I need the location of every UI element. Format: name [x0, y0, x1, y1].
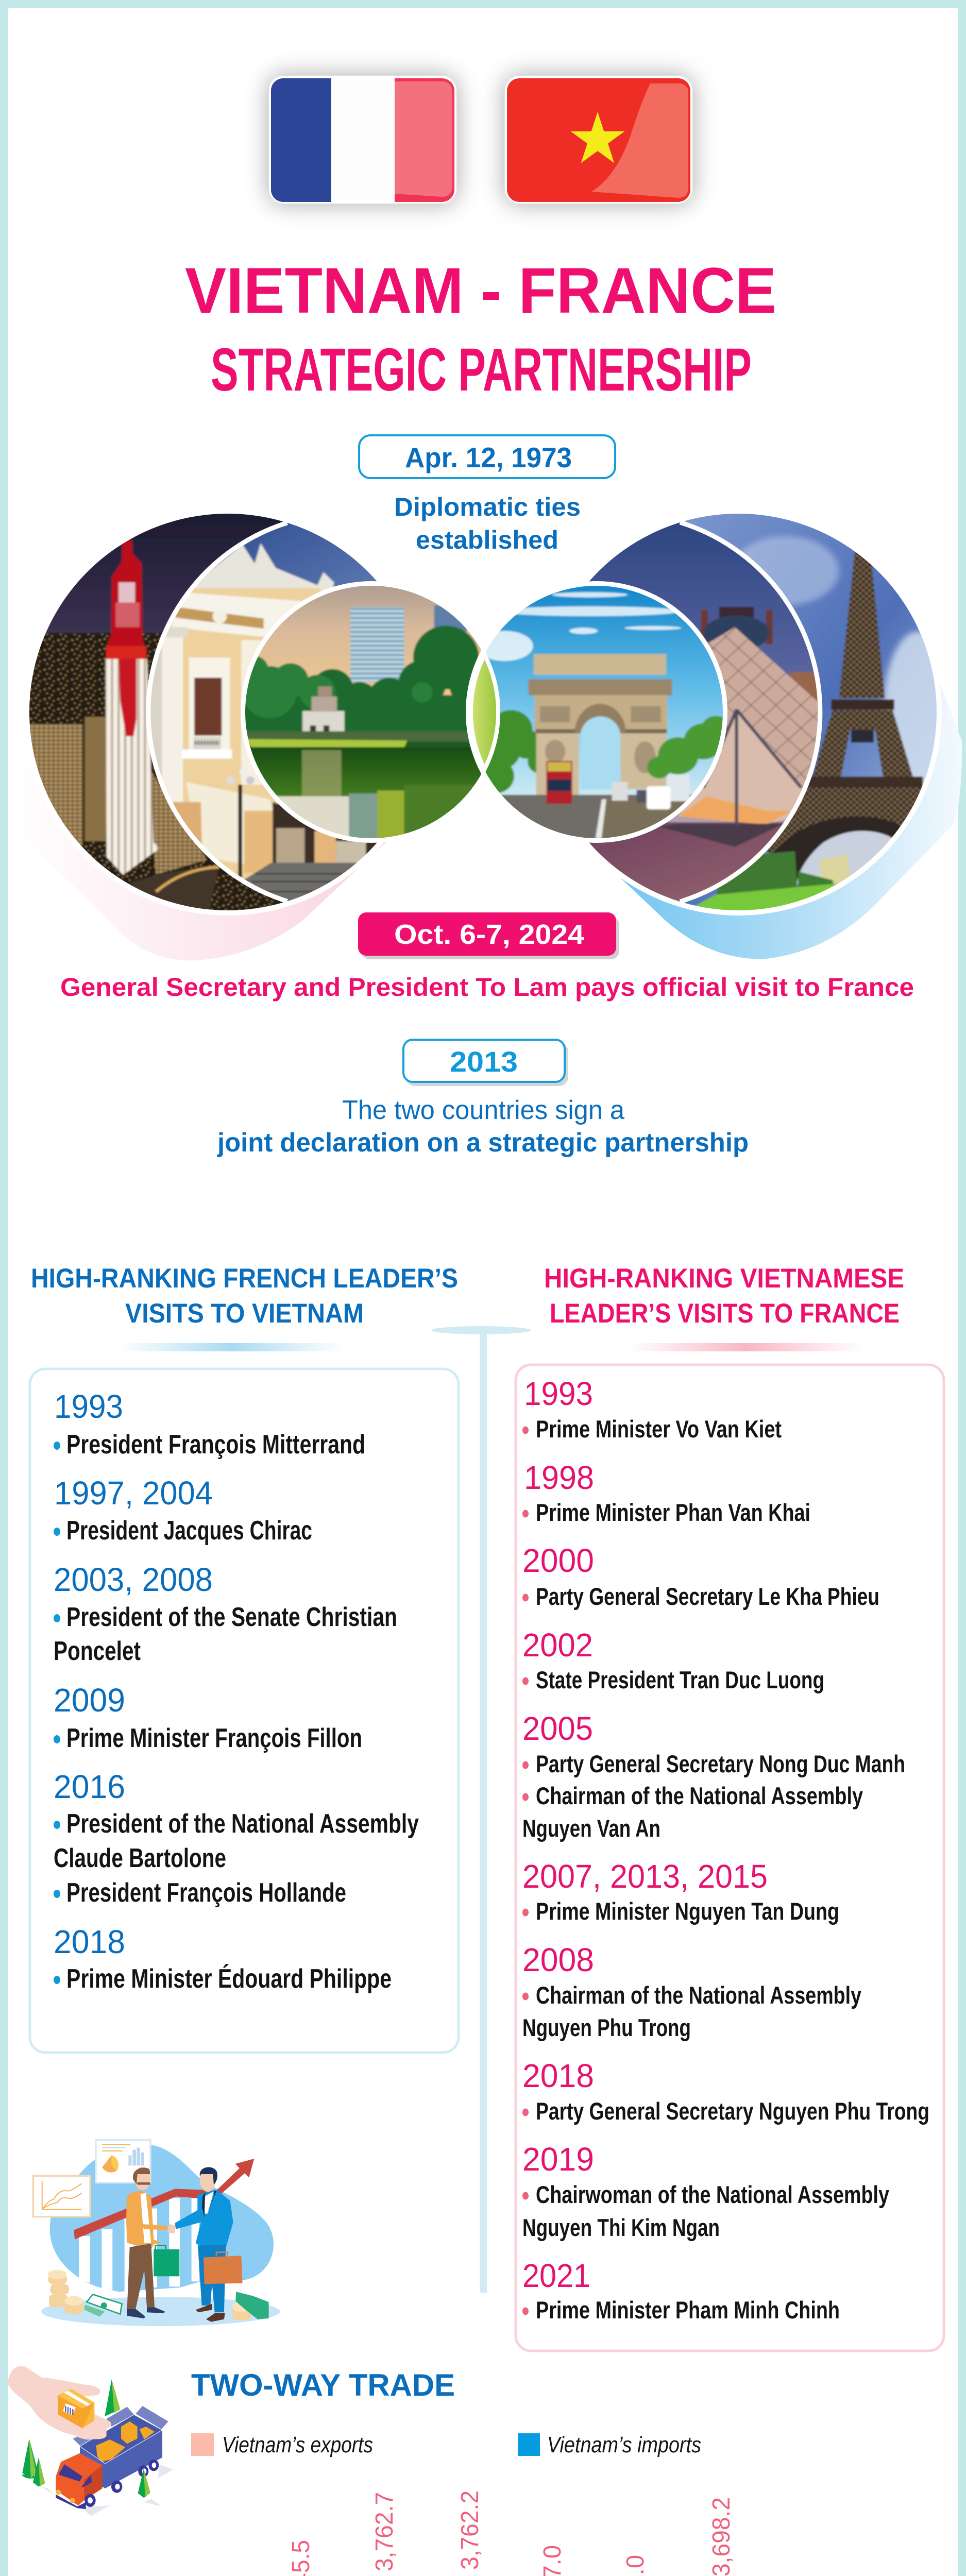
photo collage: Vietnam and France landmarks [0, 493, 966, 960]
text: diplomatic ties: established [416, 526, 558, 554]
entry: 2008: Chairman of the National Assembly [536, 1981, 861, 2009]
entry: 2002: State President Tran Duc Luong [536, 1666, 824, 1693]
entry: 2005: 2005 [522, 1710, 593, 1747]
date badge: Oct 2024 [358, 912, 619, 959]
entry: 2019 [522, 2141, 889, 2241]
flag: France [268, 75, 457, 205]
entry: 1993 [522, 1375, 782, 1443]
text: joint declaration [217, 1095, 749, 1158]
entry: 1997, 2004: President Jacques Chirac [66, 1516, 312, 1546]
photo: Hanoi Opera House [150, 522, 377, 902]
entry: 2016: President of the National Assembly [66, 1809, 419, 1839]
entry: 2008: 2008 [522, 1941, 594, 1978]
legend: Vietnam’s exports [222, 2432, 373, 2458]
icon: business handshake [33, 2140, 280, 2326]
photo: Hoan Kiem Lake [245, 586, 481, 838]
text: diplomatic ties [394, 493, 581, 554]
entry: 2009: 2009 [54, 1682, 125, 1719]
year 2022: 3,698.2 [708, 2497, 735, 2576]
text: joint declaration: joint declaration on a strategic partnership [217, 1128, 749, 1158]
year 2018: 3,762.7 [371, 2492, 398, 2571]
date badge: 1973: Apr. 12, 1973 [405, 442, 572, 473]
photo: Arc de Triomphe [485, 586, 723, 838]
photo: Landmark tower at night [29, 514, 358, 910]
year 2019: 3,762.2 [456, 2490, 484, 2570]
panel: Vietnamese leaders [516, 1365, 944, 2351]
entry: 1993: 1993 [524, 1375, 593, 1412]
entry: 2019: Chairwoman of the National Assembly [536, 2181, 889, 2208]
flags [268, 75, 693, 205]
text: official visit: General Secretary and President To Lam pays official visit to France [60, 973, 914, 1002]
entry: 2002: 2002 [522, 1626, 593, 1664]
entry: 1997, 2004 [54, 1475, 312, 1546]
entry: 2019: 2019 [522, 2141, 594, 2178]
photo: Eiffel Tower [668, 514, 937, 910]
entry: 1998 [522, 1459, 810, 1526]
entry: 2016: President François Hollande [66, 1878, 346, 1908]
bar chart: two-way trade [34, 2490, 950, 2576]
entry: 1993: President François Mitterrand [66, 1430, 365, 1460]
panel: French leaders [30, 1369, 459, 2053]
legend: Vietnam’s imports [547, 2432, 701, 2458]
entry: 2005: Chairman of the National Assembly [536, 1782, 863, 1809]
entry: 2000 [522, 1542, 879, 1610]
text: diplomatic ties: Diplomatic ties [394, 493, 581, 521]
soft pink backdrop [9, 672, 386, 960]
entry: 2000: Party General Secretary Le Kha Phieu [536, 1583, 879, 1610]
entry: 2021 [522, 2257, 840, 2324]
entry: 2005: Nguyen Van An [522, 1815, 660, 1842]
entry: 2018: 2018 [522, 2057, 594, 2094]
entry: 2019: Nguyen Thi Kim Ngan [522, 2214, 720, 2241]
entry: 2021: Prime Minister Pham Minh Chinh [536, 2296, 840, 2324]
entry: 2003, 2008: 2003, 2008 [54, 1561, 213, 1598]
date badge: 2013: 2013 [450, 1045, 518, 1078]
entry: 1998: 1998 [524, 1459, 594, 1496]
entry: 1993 [54, 1388, 365, 1460]
entry: 1993: 1993 [54, 1388, 123, 1425]
entry: 2007, 2013, 2015 [522, 1858, 839, 1925]
entry: 2016: Claude Bartolone [54, 1843, 226, 1873]
entry: 2003, 2008: President of the Senate Christian [66, 1602, 397, 1632]
date badge: 1973 [359, 435, 615, 478]
soft blue backdrop [615, 666, 962, 959]
heading: Vietnamese leaders' visits [544, 1263, 904, 1351]
entry: 2000: 2000 [522, 1542, 594, 1579]
entry: 1993: Prime Minister Vo Van Kiet [536, 1415, 782, 1443]
entry: 2007, 2013, 2015: Prime Minister Nguyen Tan Dung [536, 1897, 839, 1925]
entry: 2016 [54, 1768, 419, 1908]
entry: 2018: Prime Minister Édouard Philippe [66, 1964, 392, 1994]
entry: 2018 [54, 1923, 392, 1994]
text: joint declaration: The two countries sign a [342, 1095, 624, 1125]
entry: 2016: 2016 [54, 1768, 125, 1805]
entry: 2018 [522, 2057, 929, 2125]
entry: 2018: 2018 [54, 1923, 125, 1960]
entry: 1998: Prime Minister Phan Van Khai [536, 1499, 810, 1526]
entry: 2003, 2008 [54, 1561, 397, 1666]
entry: 2007, 2013, 2015: 2007, 2013, 2015 [522, 1858, 768, 1895]
entry: 2021: 2021 [522, 2257, 590, 2294]
entry: 2003, 2008: Poncelet [54, 1636, 141, 1666]
green tree sliver between the circles [471, 655, 498, 769]
date badge: Oct 2024: Oct. 6-7, 2024 [394, 919, 584, 950]
date badge: 2013 [403, 1040, 568, 1086]
entry: 2009 [54, 1682, 362, 1753]
photo: Louvre Pyramid [589, 522, 818, 902]
entry: 2005 [522, 1710, 905, 1842]
entry: 2002 [522, 1626, 824, 1693]
flag: Vietnam [504, 75, 693, 205]
heading: French leaders' visits: VISITS TO VIETNAM [125, 1298, 364, 1329]
title: VIETNAM - FRANCE [185, 255, 776, 327]
heading: Vietnamese leaders' visits: HIGH-RANKING VIETNAMESE [544, 1263, 904, 1294]
icon: delivery truck and hand [8, 2366, 174, 2516]
center divider [431, 1326, 531, 2293]
entry: 2008 [522, 1941, 861, 2041]
heading: French leaders' visits [31, 1263, 458, 1351]
heading: French leaders' visits: HIGH-RANKING FRENCH LEADER’S [31, 1263, 458, 1294]
entry: 1997, 2004: 1997, 2004 [54, 1475, 213, 1512]
entry: 2009: Prime Minister François Fillon [66, 1723, 362, 1753]
heading: Vietnamese leaders' visits: LEADER’S VISITS TO FRANCE [550, 1298, 900, 1329]
entry: 2008: Nguyen Phu Trong [522, 2014, 691, 2041]
heading: two-way trade: TWO-WAY TRADE [191, 2368, 455, 2402]
legend [191, 2432, 701, 2458]
